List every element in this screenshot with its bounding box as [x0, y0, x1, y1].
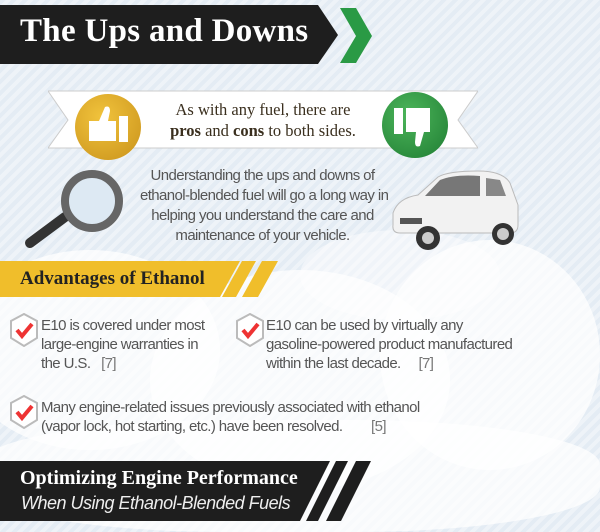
advantage 2: E10 can be used by virtually any	[266, 317, 463, 334]
bottom banner: When Using Ethanol-Blended Fuels	[21, 493, 290, 513]
ribbon with pros and cons	[48, 90, 478, 148]
advantage 1: the U.S. [7]	[41, 355, 116, 372]
icon: check	[10, 313, 38, 347]
advantage 1: E10 is covered under most	[41, 317, 204, 334]
bottom banner: Optimizing Engine Performance	[20, 467, 298, 489]
bottom banner	[0, 461, 371, 521]
icon: magnifier	[25, 170, 123, 248]
title banner: The Ups and Downs	[20, 13, 308, 49]
advantage 1: large-engine warranties in	[41, 336, 198, 353]
advantage 3: Many engine-related issues previously associated with ethanol	[41, 399, 420, 416]
icon: thumbs down	[382, 92, 448, 158]
advantages banner	[0, 261, 278, 297]
advantage 2: gasoline-powered product manufactured	[266, 336, 512, 353]
advantage 2	[236, 313, 512, 372]
intro paragraph: helping you understand the care and	[151, 207, 374, 224]
intro paragraph: maintenance of your vehicle.	[175, 227, 350, 244]
icon: thumbs up	[75, 94, 141, 160]
intro paragraph	[140, 167, 388, 244]
advantage 3: (vapor lock, hot starting, etc.) have been resolved. [5]	[41, 418, 386, 435]
title banner	[0, 5, 372, 64]
advantage 3	[10, 395, 420, 435]
icon: car	[392, 170, 518, 250]
ribbon with pros and cons: pros and cons to both sides.	[170, 121, 356, 140]
icon: check	[10, 395, 38, 429]
intro paragraph: Understanding the ups and downs of	[151, 167, 374, 184]
ribbon with pros and cons: As with any fuel, there are	[175, 100, 350, 119]
advantage 1	[10, 313, 205, 372]
advantages banner: Advantages of Ethanol	[20, 268, 205, 289]
icon: check	[236, 313, 264, 347]
intro paragraph: ethanol-blended fuel will go a long way in	[140, 187, 388, 204]
advantage 2: within the last decade. [7]	[266, 355, 433, 372]
